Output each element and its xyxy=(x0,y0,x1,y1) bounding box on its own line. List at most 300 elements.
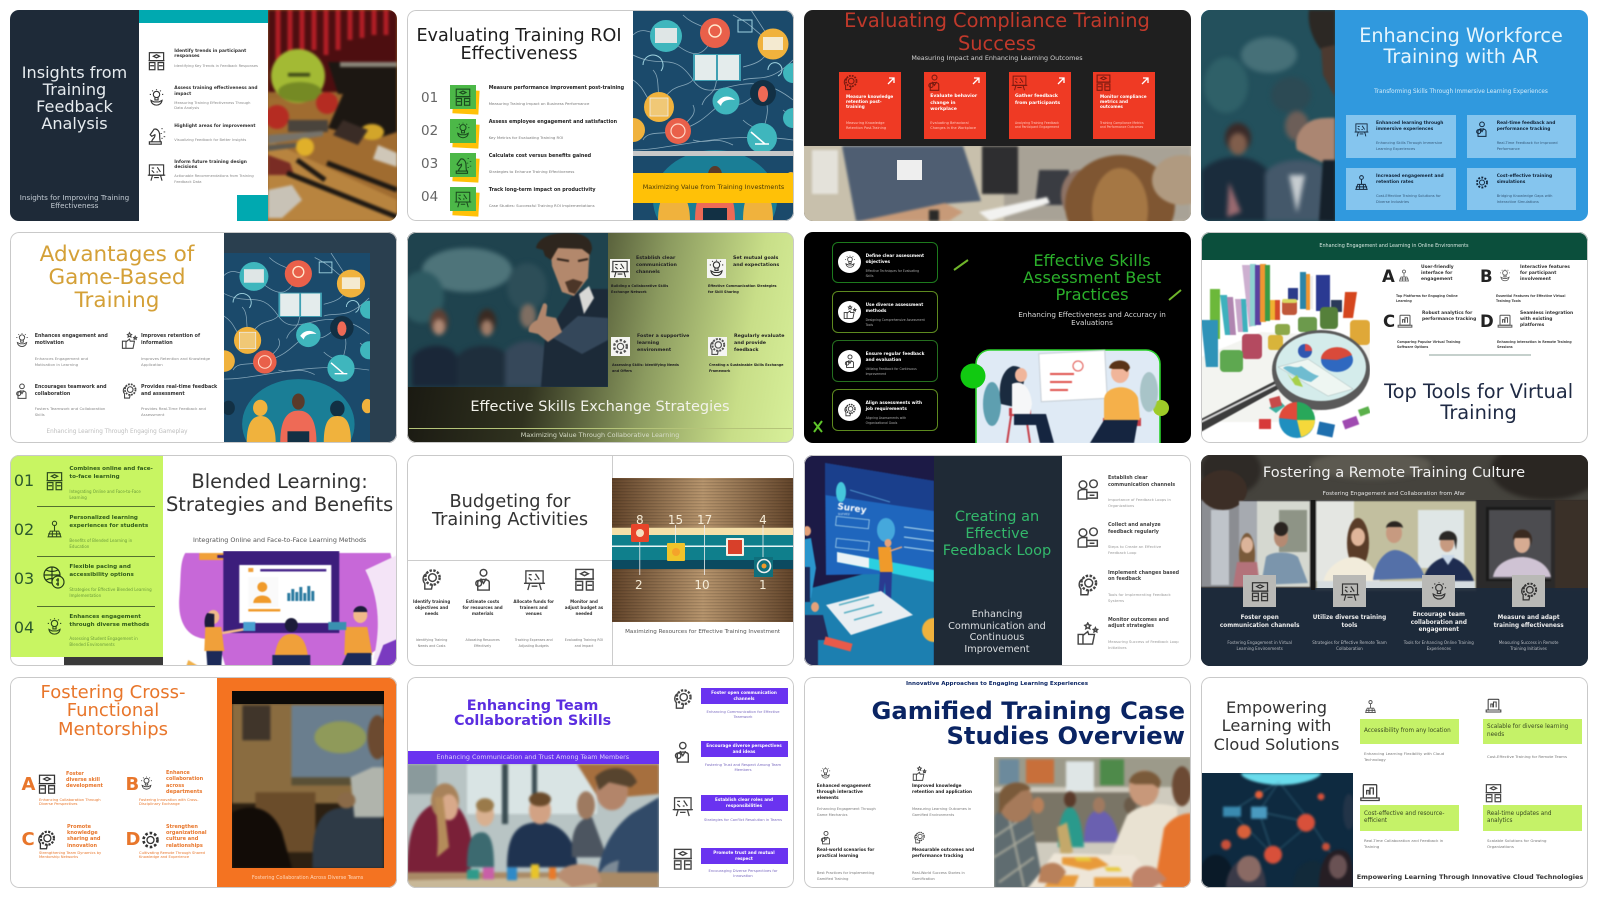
image: cloud network with learners xyxy=(1201,773,1352,888)
column 4: Measuring Success in Remote xyxy=(1499,640,1558,645)
red card 4: Monitor compliance xyxy=(1100,94,1147,99)
number 03: 03 xyxy=(14,569,34,588)
item 4 detail: Initiatives xyxy=(1108,645,1127,650)
illustration: survey screen: Surey xyxy=(837,502,867,516)
title: Top Tools for Virtual xyxy=(1384,380,1573,403)
item 4 heading: Regularly evaluate xyxy=(734,334,784,339)
item 1 detail: Enhancing Engagement Through xyxy=(817,807,876,811)
panel: Evaluating Training ROI Effectiveness xyxy=(407,10,794,221)
photo: trainer handing out papers xyxy=(804,146,1191,221)
tool C xyxy=(1381,311,1471,353)
item 2 detail: Improves Retention and Knowledge xyxy=(141,356,210,360)
item 2 detail xyxy=(708,284,777,295)
subtitle xyxy=(1018,310,1166,328)
icon: cap xyxy=(122,383,136,399)
red card 4: outcomes xyxy=(1100,104,1123,109)
step 02: 02 xyxy=(421,123,438,139)
action 2: and ideas xyxy=(733,749,755,754)
step card 4: Organizational Goals xyxy=(866,420,897,424)
title: Mentorships xyxy=(58,719,168,740)
item 2 heading xyxy=(1108,523,1161,537)
mentorship A: diverse skill xyxy=(66,777,100,783)
column 1: Foster open xyxy=(1241,615,1279,621)
title: Effective Skills xyxy=(1033,251,1151,270)
item 3 detail: Tools for Implementing Feedback xyxy=(1108,592,1171,596)
tool C: Comparing Popular Virtual Training xyxy=(1397,340,1460,344)
mentorship B: Fostering Innovation with Cross- xyxy=(139,798,198,802)
red card 3: from participants xyxy=(1015,101,1060,106)
image: timeline on wood: 15 xyxy=(668,513,683,527)
item 1 detail: Game Mechanics xyxy=(817,812,848,816)
tool A xyxy=(1381,265,1471,307)
feature box 1: immersive experiences xyxy=(1376,127,1433,132)
title: Gamified Training Case xyxy=(872,696,1185,724)
tool A: engagement xyxy=(1421,277,1452,282)
panel: Blended Learning: Strategies and Benefits xyxy=(10,455,397,666)
action 3: Establish clear roles and xyxy=(715,796,773,802)
step card 1: Effective Techniques for Evaluating xyxy=(866,268,919,272)
column 3: trainers and xyxy=(520,605,548,610)
item 2 detail: Effective Communication Strategies xyxy=(708,284,777,288)
item 2 heading: and expectations xyxy=(733,263,779,268)
feature box 1: Enhanced learning through xyxy=(1376,121,1443,126)
item 4 detail xyxy=(141,406,206,417)
item 2 detail: Steps to Create an Effective xyxy=(1108,544,1161,549)
item 2 heading: information xyxy=(141,340,173,346)
icon: gears xyxy=(611,337,630,356)
mentorship A: Enhancing Collaboration Through xyxy=(39,798,101,802)
column 1: communication channels xyxy=(1220,623,1299,629)
mentorship B: departments xyxy=(166,789,202,795)
step card 4: Align assessments with xyxy=(866,401,922,406)
item 4 heading: through diverse methods xyxy=(69,622,149,628)
footer: Maximizing Value Through Collaborative Learning xyxy=(521,431,679,439)
title: Functional xyxy=(67,700,159,721)
item 2 detail: Measuring Learning Outcomes in xyxy=(912,807,971,811)
title xyxy=(22,63,127,133)
item 2 heading: Improves retention of xyxy=(141,334,200,338)
column 1: Fostering Engagement in Virtual xyxy=(1227,640,1292,645)
step card 2: Tools xyxy=(866,322,873,326)
item 4 heading: performance tracking xyxy=(912,853,963,858)
title xyxy=(40,684,186,739)
benefit 1 xyxy=(1360,696,1459,764)
item 3 detail: Visualizing Feedback for Better Insights xyxy=(174,138,246,142)
column 1: needs xyxy=(425,611,438,616)
step card 2 xyxy=(832,291,938,332)
item 2 heading: impact xyxy=(174,92,191,97)
column 2: tools xyxy=(1342,623,1357,629)
column 1: Identify training xyxy=(413,599,450,604)
title: Strategies and Benefits xyxy=(166,493,393,516)
red card 2 xyxy=(924,72,986,139)
item 2 heading xyxy=(141,333,200,346)
title: Success xyxy=(958,32,1036,55)
item 4 heading xyxy=(141,384,218,396)
item 1 detail xyxy=(1108,497,1171,510)
number 04: 04 xyxy=(14,618,34,637)
benefit 4: analytics xyxy=(1487,818,1512,824)
item 1 heading: channels xyxy=(636,270,660,275)
column 4: Monitor and xyxy=(570,599,598,604)
icon: gear head xyxy=(708,337,727,356)
benefit 3: Real-Time Collaboration and Feedback in xyxy=(1364,838,1443,843)
item 2 detail xyxy=(1108,544,1161,557)
column 3: engagement xyxy=(1419,627,1459,633)
panel: Creating an Effective Feedback Loop xyxy=(804,455,1191,666)
item 1 detail: Building a Collaborative Skills xyxy=(611,284,668,288)
panel: Top Tools for Virtual Training xyxy=(1201,232,1588,443)
red card 1: training xyxy=(846,104,865,109)
red card 2: Evaluating Behavioral xyxy=(930,121,969,125)
step card 3 xyxy=(832,340,938,382)
icon: globe with dollar xyxy=(43,566,66,590)
step 04: 04 xyxy=(421,189,438,205)
title: Learning with xyxy=(1222,716,1331,735)
item 1 detail: Identifying Key Trends in Feedback Responses xyxy=(174,64,258,68)
panel: Enhancing Workforce Training with AR xyxy=(1201,10,1588,221)
column 3: Experiences xyxy=(1427,646,1451,651)
item 2 detail: Data Analysis xyxy=(174,106,199,110)
item 1 heading xyxy=(69,465,153,481)
title: Feedback Loop xyxy=(943,543,1051,559)
tool D: D xyxy=(1480,312,1494,331)
tool B: Essential Features for Effective Virtual xyxy=(1496,294,1565,298)
item 1 detail: Importance of Feedback Loops in xyxy=(1108,497,1171,502)
image: timeline on wood: 17 xyxy=(697,513,712,527)
column 3: Tools for Enhancing Online Training xyxy=(1404,640,1474,645)
item 1 detail xyxy=(69,488,141,501)
top bar xyxy=(1201,232,1588,260)
item 4 detail: Feedback Data xyxy=(174,180,201,184)
item 4 heading: feedback xyxy=(734,348,758,353)
mentorship D: relationships xyxy=(166,843,203,849)
feature box 1: Enhancing Skills Through Immersive xyxy=(1376,141,1442,145)
item 1 heading: Combines online and face- xyxy=(69,466,153,472)
illustration: survey screen xyxy=(804,455,934,666)
column 2: Strategies for Effective Remote Team xyxy=(1312,640,1387,645)
item 3 heading: Highlight areas for improvement xyxy=(174,124,256,129)
icon: chess knight xyxy=(148,128,166,145)
item 1 detail: Exchange Network xyxy=(611,290,647,294)
title: Enhancing Workforce xyxy=(1359,24,1563,47)
kicker: Innovative Approaches to Engaging Learning Experiences xyxy=(906,681,1088,687)
item 3 detail xyxy=(69,587,152,599)
feature box 4 xyxy=(1467,168,1576,210)
feature box 4: Interactive Simulations xyxy=(1497,200,1539,204)
mentorship B: Enhance xyxy=(166,770,190,776)
item 3 detail: Assessing Skills: Identifying Needs xyxy=(612,363,679,367)
red card 4: Training Compliance Metrics xyxy=(1100,121,1144,125)
decorative marks and illustration xyxy=(804,232,1191,443)
column 3: Allocate funds for xyxy=(513,599,554,604)
feature box 2: Performance xyxy=(1497,147,1520,151)
subtitle: Insights for Improving Training xyxy=(20,192,129,202)
item 4 heading xyxy=(1108,618,1169,631)
action 2: Members xyxy=(734,768,752,772)
item 4 detail: Framework xyxy=(709,369,730,373)
item 2 detail xyxy=(141,356,210,367)
image: learning network illustration xyxy=(633,10,794,221)
number 02: 02 xyxy=(14,520,34,539)
step 03 xyxy=(421,153,591,183)
action 1: channels xyxy=(733,696,755,701)
icon: bulb xyxy=(16,333,28,347)
item 3 detail xyxy=(35,406,105,417)
step 04 xyxy=(421,187,596,217)
red card 1: Measure knowledge xyxy=(846,94,893,99)
action 4: Promote trust and mutual xyxy=(713,850,775,855)
step card 4: job requirements xyxy=(866,407,907,412)
feature box 1 xyxy=(1346,115,1456,158)
feature box 1: Learning Experiences xyxy=(1376,147,1415,151)
red card 1 xyxy=(839,72,901,139)
number 01: 01 xyxy=(14,471,34,490)
photo: workshop around table xyxy=(994,757,1191,888)
benefit 2: Cost-Effective Training for Remote Teams xyxy=(1487,754,1567,759)
item 2 detail xyxy=(69,538,132,550)
item 4 detail: Provides Real-Time Feedback and xyxy=(141,406,206,410)
item 1 heading: communication channels xyxy=(1108,483,1175,488)
title: Blended Learning: xyxy=(191,470,368,493)
item 3 heading: environment xyxy=(637,348,671,353)
item 4 heading: Enhances engagement xyxy=(69,614,141,620)
item 3 heading: Foster a supportive xyxy=(637,334,689,339)
step 04: Track long-term impact on productivity xyxy=(489,187,596,193)
red card 4 xyxy=(1093,72,1155,139)
column 4 xyxy=(1481,575,1581,659)
feature box 2: Real-Time Feedback for Improved xyxy=(1497,141,1558,145)
red card 4: metrics and xyxy=(1100,99,1128,104)
mentorship C: Mentorship Networks xyxy=(39,855,78,859)
item 2 heading: Personalized learning xyxy=(69,515,138,521)
column 4: training effectiveness xyxy=(1494,623,1564,629)
item 4 heading: Inform future training design xyxy=(174,160,247,164)
caption: Fostering Collaboration Across Diverse Teams xyxy=(252,874,363,880)
step card 1: Skills xyxy=(866,274,873,278)
item 4 detail: Assessment xyxy=(141,412,164,417)
column 2: Allocating Resources xyxy=(465,638,500,642)
red card 2: change in xyxy=(930,101,956,106)
footer: Enhancing Learning Through Engaging Gameplay xyxy=(46,429,188,435)
title: Effective Skills Exchange Strategies xyxy=(470,399,730,415)
image: timeline on wood: 1 xyxy=(759,578,767,592)
item 3 detail: Implementation xyxy=(69,593,101,598)
benefit 2: needs xyxy=(1487,732,1504,738)
mentorship C: C xyxy=(22,829,35,850)
tool C: Software Options xyxy=(1397,344,1428,348)
title: Budgeting for xyxy=(450,492,570,512)
column 4: adjust budget as xyxy=(565,605,603,610)
column 1: Needs and Costs xyxy=(418,644,445,648)
item 1 detail: Learning xyxy=(69,495,87,500)
subtitle: Transforming Skills Through Immersive Learning Experiences xyxy=(1374,89,1548,95)
title: Studies Overview xyxy=(946,722,1185,750)
title: Game-Based xyxy=(48,265,186,290)
feature box 4: Bridging Knowledge Gaps with xyxy=(1497,194,1552,198)
item 1 detail xyxy=(35,356,88,367)
feature box 3: Increased engagement and xyxy=(1376,174,1444,179)
image: charts and magnifying glass xyxy=(1201,260,1370,443)
step 01 xyxy=(421,85,624,115)
icon: classroom xyxy=(45,469,64,493)
mentorship D: Cultivating Remote Through Shared xyxy=(139,851,205,855)
banner text: Enhancing Communication and Trust Among Team Members xyxy=(436,753,629,761)
tool D: platforms xyxy=(1520,323,1544,328)
item 4 heading: Provides real-time feedback xyxy=(141,384,217,390)
item 1 detail xyxy=(611,284,668,294)
benefit 3: Cost-effective and resource- xyxy=(1364,810,1444,816)
action 2: Encourage diverse perspectives xyxy=(706,743,782,748)
icon: board xyxy=(148,164,166,181)
banner text: Maximizing Value from Training Investments xyxy=(643,183,784,191)
column 2 xyxy=(1301,575,1391,659)
item 4 heading: and assessment xyxy=(141,392,185,396)
mentorship A: A xyxy=(22,774,35,795)
item 4 detail xyxy=(912,871,965,882)
item 3 heading: collaboration xyxy=(35,392,70,396)
column 4: Training Initiatives xyxy=(1510,646,1547,651)
subtitle: Effectiveness xyxy=(51,201,98,210)
title: Training Activities xyxy=(432,510,588,530)
title xyxy=(1384,382,1573,424)
item 2 heading: Set mutual goals xyxy=(733,256,778,261)
column 2: Utilize diverse training xyxy=(1313,615,1386,621)
subtitle: Measuring Impact and Enhancing Learning Outcomes xyxy=(911,54,1083,62)
tool B xyxy=(1479,265,1579,307)
item 2 heading: experiences for students xyxy=(69,523,148,529)
item 1 heading xyxy=(817,783,871,801)
column 3: Adjusting Budgets xyxy=(519,644,549,648)
item 1 heading: responses xyxy=(174,54,200,59)
item 3 heading xyxy=(637,334,689,355)
item 2 heading: Assess training effectiveness and xyxy=(174,86,257,91)
item 4 heading xyxy=(69,613,149,629)
mentorship B xyxy=(115,770,215,808)
title: Training xyxy=(43,80,106,99)
item 1 detail: Enhances Engagement and xyxy=(35,356,88,360)
item 3 detail: Best Practices for Implementing xyxy=(817,871,874,875)
action 4: Encouraging Diverse Perspectives for xyxy=(708,869,778,873)
mentorship D: organizational xyxy=(166,830,207,836)
banner xyxy=(407,751,659,764)
panel: Gamified Training Case Studies Overview xyxy=(804,677,1191,888)
icon: board xyxy=(610,259,630,278)
mentorship A: Diverse Perspectives xyxy=(39,802,77,806)
tool B: Interactive features xyxy=(1520,265,1570,270)
step 02: Assess employee engagement and satisfaction xyxy=(489,119,617,125)
item 1 heading xyxy=(636,256,677,275)
step card 4: Aligning Assessments with xyxy=(866,416,906,420)
tool A: Learning xyxy=(1396,298,1412,302)
item 3 heading: Implement changes based xyxy=(1108,571,1179,576)
tool D xyxy=(1479,311,1579,353)
step card 3: Ensure regular feedback xyxy=(866,352,924,357)
action 1: Teamwork xyxy=(734,715,752,719)
feature box 2 xyxy=(1467,115,1576,158)
title: Fostering Cross- xyxy=(40,682,186,703)
step card 2: Use diverse assessment xyxy=(866,303,923,308)
mentorship B: B xyxy=(126,774,139,795)
action 2 xyxy=(671,740,789,776)
item 3 detail: Gamified Training xyxy=(817,876,848,880)
item 2 detail: Benefits of Blended Learning in xyxy=(69,538,132,543)
action 3 xyxy=(671,794,789,830)
benefit 2: Scalable for diverse learning xyxy=(1487,724,1568,730)
item 4 heading xyxy=(734,334,784,355)
icon: antenna xyxy=(46,517,63,541)
photo: sports gear and tools on table xyxy=(268,10,397,221)
item 3 heading: on feedback xyxy=(1108,577,1141,582)
tool C: C xyxy=(1383,312,1395,331)
column 4: Evaluating Training ROI xyxy=(565,638,603,642)
column 3 xyxy=(509,567,560,653)
mentorship B: collaboration xyxy=(166,776,203,782)
benefit 4 xyxy=(1483,783,1582,851)
item 1 heading xyxy=(35,333,108,346)
column 2: Effectively xyxy=(474,644,491,648)
column 1 xyxy=(1201,575,1301,659)
mentorship D xyxy=(115,824,215,862)
benefit 3: efficient xyxy=(1364,818,1387,824)
red card 4: and Performance Outcomes xyxy=(1100,125,1143,129)
item 3 heading: Encourages teamwork and xyxy=(35,384,107,390)
title: Cloud Solutions xyxy=(1214,735,1339,754)
subtitle xyxy=(20,192,129,210)
item 4 detail: Blended Environments xyxy=(69,642,115,647)
item 1 heading: communication xyxy=(636,263,677,268)
item 3 heading: accessibility options xyxy=(69,572,134,578)
title xyxy=(844,10,1150,55)
panel: Fostering Cross-Functional Mentorships xyxy=(10,677,397,888)
benefit 4: Organizations xyxy=(1487,844,1514,849)
item 2 detail: for Skill Sharing xyxy=(708,290,739,294)
column 1: Learning Environments xyxy=(1237,646,1283,651)
tool C: performance tracking xyxy=(1422,317,1476,322)
benefit 1: Technology xyxy=(1364,757,1386,762)
subtitle: Fostering Engagement and Collaboration from Afar xyxy=(1323,491,1465,497)
subtitle xyxy=(948,609,1046,655)
title: Analysis xyxy=(41,114,108,133)
column 3: venues xyxy=(526,611,542,616)
title: Collaboration Skills xyxy=(454,713,611,729)
red card 1: Retention Post-Training xyxy=(846,126,886,130)
feature box 3: retention rates xyxy=(1376,180,1413,185)
item 2 icon xyxy=(1076,526,1099,549)
step 01: 01 xyxy=(421,90,438,106)
icon: person xyxy=(16,384,26,399)
illustration: team at screen xyxy=(163,551,397,666)
item 4 heading: Monitor outcomes and xyxy=(1108,618,1169,623)
column 2: for resources and xyxy=(462,605,503,610)
item 1 icon xyxy=(1076,478,1099,501)
red card 3: and Participant Engagement xyxy=(1015,125,1059,129)
feature box 3: Diverse Industries xyxy=(1376,200,1409,204)
action 4 xyxy=(671,848,789,884)
column 4: needed xyxy=(576,611,592,616)
title xyxy=(1359,24,1563,68)
column 4 xyxy=(560,567,611,653)
column 2: materials xyxy=(472,611,493,616)
icon: thumbs xyxy=(122,332,138,349)
feature box 2: performance tracking xyxy=(1497,127,1550,132)
icon: bulb xyxy=(707,259,726,278)
subtitle: Improvement xyxy=(964,644,1030,655)
item 1 heading xyxy=(1108,476,1175,490)
mentorship C xyxy=(10,824,115,862)
red card 1: retention post- xyxy=(846,99,882,104)
red card 3 xyxy=(1009,72,1071,139)
